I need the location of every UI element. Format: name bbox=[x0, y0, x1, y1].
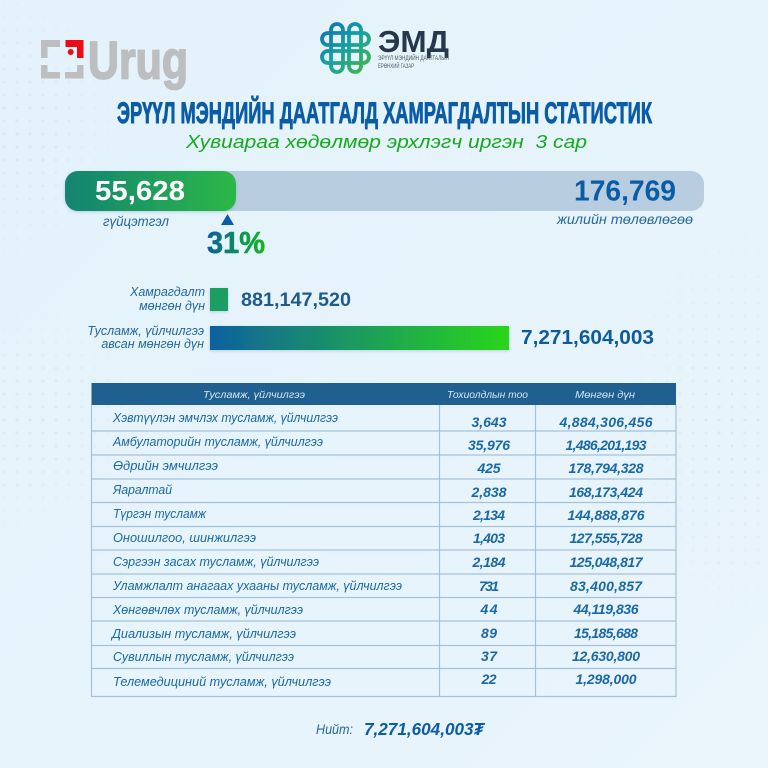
table header: Тусламж, үйлчилгээ bbox=[203, 389, 305, 401]
progress bar panel bbox=[65, 171, 704, 260]
logo: EMD: ЭМД bbox=[378, 24, 449, 59]
row: telemedicine bbox=[113, 671, 637, 689]
row: inpatient: Хэвтүүлэн эмчлэх тусламж, үйлчилгээ bbox=[112, 411, 338, 425]
total: 7,271,604,003₮ bbox=[364, 719, 485, 739]
row: traditional medicine: Уламжлалт анагаах ухааны тусламж, үйлчилгээ bbox=[112, 579, 402, 593]
row: nursing: Сувиллын тусламж, үйлчилгээ bbox=[113, 650, 294, 664]
logo: Urug bbox=[41, 32, 188, 90]
table header bbox=[92, 383, 676, 405]
logo: EMD: ЭРҮҮЛ МЭНДИЙН ДААТГАЛЫН bbox=[378, 54, 449, 62]
row: day treatment: 178,794,328 bbox=[568, 460, 644, 476]
row: nursing bbox=[113, 648, 640, 664]
table bbox=[92, 383, 676, 696]
row: outpatient: 1,486,201,193 bbox=[566, 437, 647, 453]
logo: EMD: ЕРӨНХИЙ ГАЗАР bbox=[378, 62, 414, 70]
row: rehabilitation: Сэргээн засах тусламж, үйлчилгээ bbox=[113, 555, 319, 569]
progress fill bbox=[65, 171, 236, 211]
services label: Тусламж, үйлчилгээ bbox=[87, 324, 204, 338]
row: rehabilitation: 2,184 bbox=[472, 554, 506, 570]
row: palliative: 44,119,836 bbox=[572, 601, 639, 617]
achieved caption: гүйцэтгэл bbox=[103, 213, 169, 229]
row: nursing: 37 bbox=[481, 648, 498, 664]
row: ambulance: 2,134 bbox=[472, 507, 505, 523]
subtitle: Хувиараа хөдөлмөр эрхлэгч иргэн 3 сар bbox=[185, 131, 587, 152]
coverage label: мөнгөн дүн bbox=[139, 299, 205, 313]
coverage amount: 881,147,520 bbox=[241, 290, 351, 311]
plan value: 176,769 bbox=[574, 176, 676, 208]
percent: 31% bbox=[207, 225, 265, 260]
coverage bar bbox=[210, 288, 228, 311]
row: dialysis: Диализын тусламж, үйлчилгээ bbox=[110, 627, 296, 641]
row: ambulance bbox=[113, 507, 645, 523]
row: rehabilitation bbox=[113, 554, 644, 570]
logo: EMD bbox=[322, 24, 449, 72]
row: dialysis: 89 bbox=[481, 625, 497, 641]
row: inpatient: 4,884,306,456 bbox=[558, 414, 653, 430]
services amount: 7,271,604,003 bbox=[521, 327, 654, 349]
row: telemedicine: 22 bbox=[480, 671, 497, 687]
row: diagnostics: 1,403 bbox=[473, 530, 505, 546]
table header: Тохиолдлын тоо bbox=[447, 389, 528, 401]
row: day treatment: Өдрийн эмчилгээ bbox=[113, 459, 218, 473]
row: dialysis bbox=[110, 625, 638, 641]
row: traditional medicine bbox=[112, 578, 643, 594]
services label bbox=[87, 324, 204, 351]
progress track bbox=[65, 171, 704, 211]
achieved value: 55,628 bbox=[95, 175, 185, 206]
row: palliative bbox=[112, 601, 639, 617]
row: day treatment bbox=[113, 459, 644, 476]
row: traditional medicine: 731 bbox=[479, 578, 499, 594]
row: dialysis: 15,185,688 bbox=[574, 625, 638, 641]
coverage label bbox=[129, 285, 205, 313]
row: diagnostics: 127,555,728 bbox=[570, 530, 643, 546]
row: emergency: 2,838 bbox=[470, 484, 507, 500]
row: palliative: 44 bbox=[480, 601, 498, 617]
row: outpatient bbox=[112, 435, 647, 453]
row: emergency bbox=[112, 483, 643, 500]
row: inpatient bbox=[112, 411, 653, 430]
row: nursing: 12,630,800 bbox=[572, 648, 640, 664]
row: day treatment: 425 bbox=[476, 460, 501, 476]
arrow marker bbox=[221, 214, 234, 225]
row: telemedicine: Телемедициний тусламж, үйлчилгээ bbox=[113, 675, 331, 689]
services label: авсан мөнгөн дүн bbox=[101, 337, 204, 351]
comparison bars bbox=[87, 285, 654, 351]
row: emergency: Яаралтай bbox=[112, 483, 172, 497]
row: diagnostics bbox=[113, 530, 643, 546]
row: inpatient: 3,643 bbox=[472, 414, 507, 430]
row: palliative: Хөнгөвчлөх тусламж, үйлчилгээ bbox=[112, 603, 303, 617]
row: traditional medicine: 83,400,857 bbox=[570, 578, 643, 594]
row: outpatient: Амбулаторийн тусламж, үйлчилгээ bbox=[112, 435, 323, 449]
total: Нийт: bbox=[316, 722, 353, 737]
coverage label: Хамрагдалт bbox=[129, 285, 205, 299]
row: outpatient: 35,976 bbox=[468, 437, 510, 453]
row: rehabilitation: 125,048,817 bbox=[570, 554, 644, 570]
table header: Мөнгөн дүн bbox=[575, 389, 635, 401]
row: ambulance: 144,888,876 bbox=[568, 507, 645, 523]
row: diagnostics: Оношилгоо, шинжилгээ bbox=[113, 531, 256, 545]
row: ambulance: Түргэн тусламж bbox=[113, 507, 207, 521]
row: telemedicine: 1,298,000 bbox=[576, 671, 637, 687]
services bar bbox=[210, 326, 509, 350]
plan caption: жилийн төлөвлөгөө bbox=[556, 211, 693, 227]
logo: Urug: Urug bbox=[88, 32, 188, 90]
row: emergency: 168,173,424 bbox=[569, 484, 643, 500]
